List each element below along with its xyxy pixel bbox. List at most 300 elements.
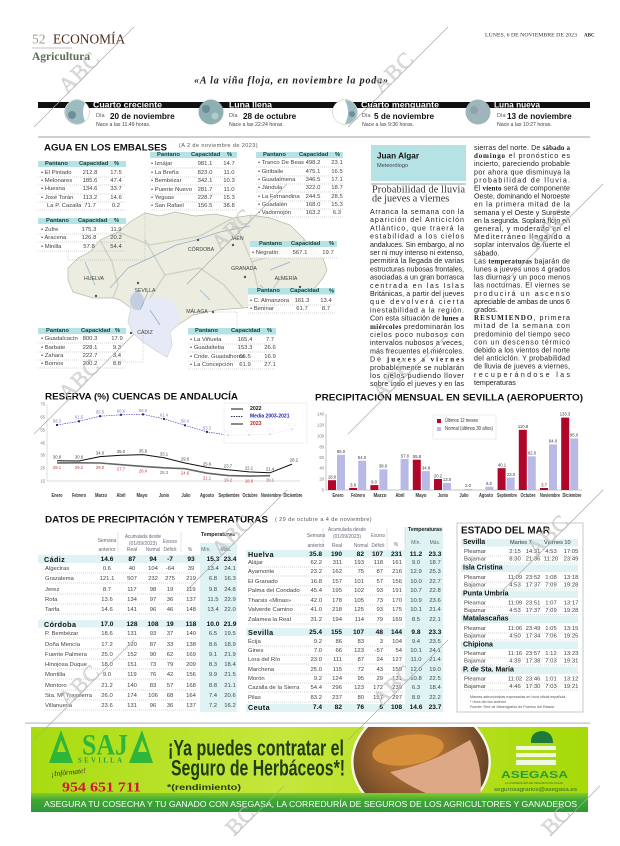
article text: second column: soplar intervalos de fuerte el (474, 241, 570, 249)
line: 2023: 19.2 (224, 478, 233, 482)
tide rows: Sevilla (463, 539, 485, 546)
table: Cádiz y Córdoba: 42 (167, 672, 173, 678)
month labels (52, 493, 302, 499)
month labels: Febrero (351, 493, 365, 499)
bar value labels: 62.0 (528, 450, 537, 456)
tide rows: 19:28 (564, 582, 579, 588)
reservoir table: Córdoba: 156.5 (198, 203, 213, 209)
table: Huelva, Sevilla y Ceuta: 296 (332, 685, 343, 691)
table: Huelva, Sevilla y Ceuta: 157 (373, 695, 383, 701)
heading: DATOS DE PRECIPITACIÓN Y TEMPERATURAS (45, 514, 269, 526)
reservoir table: Málaga (188, 328, 276, 369)
reservoir table: Jaén: • Vadomojón (258, 210, 291, 216)
table: Cádiz y Córdoba: 16.3 (224, 576, 236, 582)
watermarks: ABC: ABC (53, 46, 105, 98)
table: Huelva, Sevilla y Ceuta: 237 (332, 695, 342, 701)
article text: first column: intervalos nubosos a veces, (370, 339, 464, 347)
reservoir table: Granada: % (329, 241, 334, 247)
reservoir table: Córdoba: • Yeguas (151, 195, 174, 201)
month labels: Julio (460, 493, 469, 499)
footnotes: Fuente: Red de Mareógrafos de Puertos del Estado (470, 705, 554, 709)
table: Cádiz y Córdoba: Grazalema (45, 576, 75, 582)
reservoir table: Almería: Pantano (257, 288, 280, 294)
table: Huelva, Sevilla y Ceuta: 101 (354, 579, 364, 585)
table: Huelva, Sevilla y Ceuta: 35.8 (309, 550, 322, 558)
article text: second column: del anticiclón. Y probabilidad (474, 355, 570, 363)
table: Cádiz y Córdoba: 13.4 (207, 566, 219, 572)
table: Cádiz y Córdoba: 140 (127, 683, 138, 689)
legend: 2022 (250, 406, 262, 412)
legend (224, 403, 307, 443)
bar value labels: 55.8 (413, 454, 422, 459)
tide rows: 4:53 (509, 608, 521, 614)
table: Cádiz y Córdoba: 11.5 (207, 597, 219, 603)
month labels: Febrero (72, 493, 86, 499)
reservoir table: Córdoba: 342.1 (198, 178, 212, 184)
date note: ( 29 de octubre a 4 de noviembre) (275, 517, 372, 523)
table: Huelva, Sevilla y Ceuta: Exceso (371, 533, 385, 539)
table: Cádiz y Córdoba: Doña Mencía (45, 642, 81, 648)
tide rows: Punta Umbría (463, 590, 509, 598)
phone contact: 954 651 711 (62, 780, 141, 794)
moon phase text: luna nueva: Día (497, 113, 506, 119)
table: Huelva, Sevilla y Ceuta: 82 (335, 704, 342, 710)
table: Huelva, Sevilla y Ceuta: 95 (357, 676, 365, 682)
table: Cádiz y Córdoba: Cádiz (44, 554, 65, 564)
reservoir table: Granada: 567.1 (293, 250, 307, 256)
month labels: Mayo (416, 493, 427, 499)
table: Cádiz y Córdoba: 121.1 (100, 576, 114, 582)
axes: 80 (319, 444, 325, 450)
table: Cádiz y Córdoba: 131 (127, 631, 137, 637)
table: Huelva, Sevilla y Ceuta: 21.4 (429, 657, 441, 663)
bar value labels: 20.2 (434, 474, 443, 478)
reservoir table: Zufre: 57.8 (83, 244, 95, 250)
table: Huelva, Sevilla y Ceuta: 8.9 (412, 695, 420, 701)
reservoir table: Málaga: 27.1 (264, 362, 276, 368)
article text: second column: por ahora que disminuya la (474, 168, 570, 176)
table: Cádiz y Córdoba: 21.1 (224, 683, 236, 689)
table: Huelva, Sevilla y Ceuta: anterior (308, 543, 325, 549)
table: Huelva, Sevilla y Ceuta: 10.0 (410, 579, 422, 585)
article text: first column: inestabilidad a la región. (370, 306, 464, 314)
table: Cádiz y Córdoba: 118 (186, 620, 197, 628)
reservoir table: Huelva: • José Torán (41, 195, 73, 201)
reservoir table: Huelva: 47.4 (110, 178, 122, 184)
table: Huelva, Sevilla y Ceuta: 170 (392, 598, 403, 604)
line: media 2003-2021: 50.9 (245, 428, 254, 434)
ASAJA logo: SAJ (82, 728, 128, 762)
line: 2023: 26.4 (139, 468, 148, 474)
table: Cádiz y Córdoba: 104 (148, 566, 159, 572)
reservoir table: Huelva: 71.7 (84, 203, 96, 209)
line: 2022: 28.2 (290, 458, 299, 462)
table: Huelva, Sevilla y Ceuta: 9.2 (314, 676, 322, 682)
table: Cádiz y Córdoba: 128 (126, 620, 138, 628)
tide rows: Bajamar (464, 556, 486, 562)
table: Cádiz y Córdoba: 152 (127, 652, 137, 658)
table: Cádiz y Córdoba: 174 (127, 693, 138, 699)
reservoir table: Jaén: 28.5 (331, 194, 343, 200)
moon phase text: cuarto creciente (93, 100, 175, 128)
panel: estado del mar (457, 523, 583, 712)
reservoir table: Jaén: • La Fernandina (258, 194, 300, 200)
table: Cádiz y Córdoba: 10.0 (207, 620, 220, 628)
article text: first column: más frecuentes el miércoles. (370, 347, 464, 355)
reservoir table: Huelva: 14.6 (110, 195, 122, 201)
bar value labels (328, 412, 579, 488)
article text: first column: que devolverá cierta (370, 298, 464, 306)
table: Huelva, Sevilla y Ceuta: 104 (392, 639, 403, 645)
table: Huelva, Sevilla y Ceuta: 11.2 (410, 550, 423, 558)
tide rows: 23:46 (526, 676, 541, 682)
table: Huelva, Sevilla y Ceuta: Lora del Río (248, 657, 281, 663)
table: Cádiz y Córdoba: 23.4 (224, 556, 237, 562)
tide rows: 13:17 (564, 600, 578, 606)
moon phase text: luna llena: Nace a las 22:24 horas. (229, 122, 284, 128)
moon: luna llena (198, 100, 224, 124)
page header: date: LUNES, 6 DE NOVIEMBRE DE 2023 (485, 34, 578, 38)
month labels: Abril (396, 493, 405, 499)
table: Huelva, Sevilla y Ceuta: 43 (376, 667, 384, 673)
phone contact (51, 766, 141, 794)
article text: second column: de lluvia de jueves a viernes, (474, 363, 570, 371)
bar value labels: 3.7 (541, 482, 548, 488)
reservoir table: Almería: 61.7 (296, 306, 308, 312)
table: Huelva, Sevilla y Ceuta: 12.9 (410, 569, 422, 575)
tide rows: 17:37 (526, 608, 540, 614)
moon phase text: cuarto creciente: 20 de noviembre (110, 112, 175, 120)
table: Cádiz y Córdoba: Villanueva (45, 703, 73, 709)
reservoir table: Jaén: 475.1 (306, 169, 320, 175)
tide rows: 1:07 (545, 600, 557, 606)
table: Cádiz y Córdoba: 96 (150, 607, 157, 613)
month labels: Junio (438, 493, 448, 499)
table: Huelva, Sevilla y Ceuta: 24.1 (429, 648, 441, 654)
tide rows: Bajamar (464, 608, 486, 614)
table: Huelva, Sevilla y Ceuta: 169 (392, 617, 402, 623)
table: Cádiz y Córdoba: 0.6 (103, 566, 112, 572)
reservoir table: Huelva: La P. Cazalla (47, 203, 82, 209)
moon phase text: luna nueva: Luna nueva (494, 100, 540, 110)
moon phase text: luna nueva: Nace a las 10:27 horas. (497, 122, 552, 128)
table: Cádiz y Córdoba: Máx. (221, 547, 231, 553)
tide rows: 13:18 (564, 575, 579, 581)
line: 2022: 23.7 (224, 464, 233, 468)
moon phase text: luna llena: Luna llena (229, 100, 272, 110)
article text: first column: asociadas a un gran borrasca (370, 274, 464, 282)
tide rows: 23:49 (564, 556, 578, 562)
table: Huelva, Sevilla y Ceuta: Temperaturas (408, 527, 442, 533)
table: Cádiz y Córdoba: (01/09/2023) (129, 541, 157, 547)
bar value labels: 84.0 (549, 438, 558, 444)
table: Huelva, Sevilla y Ceuta: 191 (392, 588, 402, 594)
footnotes (470, 695, 566, 709)
tide rows: 13:15 (564, 626, 579, 632)
reservoir table: Jaén: 322.0 (306, 185, 321, 191)
table: Cádiz y Córdoba: 19 (167, 587, 173, 593)
reservoir table: Zufre: 126.8 (82, 235, 97, 241)
table: Huelva, Sevilla y Ceuta: 195 (332, 588, 343, 594)
watermarks: ABC: ABC (522, 509, 574, 561)
table: Huelva, Sevilla y Ceuta: Ceuta (248, 702, 271, 712)
table: Huelva, Sevilla y Ceuta: 9.0 (412, 560, 421, 566)
table: Cádiz y Córdoba: Déficit (164, 547, 177, 553)
reservoir table: Córdoba: Capacidad (191, 152, 221, 158)
table: Huelva, Sevilla y Ceuta: 125 (354, 607, 365, 613)
heading: AGUA EN LOS EMBALSES (44, 142, 168, 154)
line: 2022: 29.0 (181, 456, 190, 462)
bar value labels: 23.0 (507, 472, 516, 477)
bars: normal 30 años (337, 438, 578, 490)
axes: 65 (40, 414, 46, 420)
table: Huelva, Sevilla y Ceuta: (01/09/2023) (333, 534, 361, 540)
table: Huelva, Sevilla y Ceuta: 159 (392, 667, 402, 673)
ASEGASA logo: LA CORREDURÍA DE SEGUROS DE ASAJA (505, 781, 563, 785)
line: 2023: 25.3 (160, 470, 169, 475)
table: Huelva, Sevilla y Ceuta: 22.7 (429, 579, 441, 585)
panel: datos de precipitación y temperaturas (38, 514, 443, 712)
table: Cádiz y Córdoba: Montoro (45, 683, 67, 689)
tide rows: 11:06 (508, 626, 523, 632)
table: Huelva, Sevilla y Ceuta: 22.8 (429, 588, 441, 594)
table: Huelva, Sevilla y Ceuta: 127 (392, 657, 402, 663)
table: Huelva, Sevilla y Ceuta: 10.1 (410, 648, 422, 654)
article text: second column: sábado. (474, 249, 499, 257)
table: Cádiz y Córdoba: 7.4 (209, 693, 218, 699)
table: Huelva, Sevilla y Ceuta: 193 (354, 560, 365, 566)
article text: second column: lunes a jueves unos 4 grados (474, 266, 570, 274)
month labels: Marzo (374, 493, 387, 499)
table: Huelva, Sevilla y Ceuta: 25.3 (429, 569, 441, 575)
reservoir table: Jaén: 18.7 (331, 185, 343, 191)
reservoir table: Málaga: % (267, 328, 272, 334)
table: Cádiz y Córdoba: Montilla (45, 672, 66, 678)
article text: second column: recuperándose las (474, 371, 570, 379)
table: Cádiz y Córdoba: 6.5 (209, 631, 218, 637)
page header: section: 52 (32, 32, 46, 46)
tide rows: Bajamar (464, 582, 486, 588)
table: Huelva, Sevilla y Ceuta: 23.3 (429, 550, 442, 558)
reservoir table: Málaga: 7.7 (266, 337, 274, 343)
moon: cuarto menguante (332, 100, 358, 124)
table: Huelva, Sevilla y Ceuta: 162 (332, 569, 342, 575)
article text: second column: las diurnas y un poco menos (474, 274, 570, 282)
axes (40, 402, 300, 484)
reservoir table: Córdoba: • Puente Nuevo (151, 187, 193, 193)
table: Cádiz y Córdoba: 22.9 (224, 597, 236, 603)
article text: first column: permitirá la llegada de varias (370, 257, 464, 265)
table: Huelva, Sevilla y Ceuta: 66 (335, 648, 343, 654)
reservoir table: Cádiz: 228.1 (83, 345, 97, 351)
axes: 25 (40, 466, 46, 470)
table: Cádiz y Córdoba: 134 (127, 597, 138, 603)
panel: moon phases (38, 100, 590, 138)
article text: second column: predominio del tiempo seco (474, 330, 570, 338)
table: Cádiz y Córdoba: 40 (129, 566, 136, 572)
table: Cádiz y Córdoba: 219 (186, 576, 196, 582)
table: Huelva, Sevilla y Ceuta: 157 (332, 579, 342, 585)
month labels: Noviembre (261, 493, 281, 499)
reservoir table: Cádiz: • Guadalcacín (41, 336, 78, 342)
chart: reserva cuencas de Andalucía (40, 390, 307, 499)
table: Huelva, Sevilla y Ceuta: 105 (354, 598, 365, 604)
article text: second column: debido a los vientos del norte (474, 346, 570, 354)
tide rows: 23:52 (526, 575, 540, 581)
footnotes: * Hora del día anterior (470, 700, 507, 704)
line: media 2003-2021: 55.4 (288, 422, 297, 428)
table: Huelva, Sevilla y Ceuta: 190 (331, 550, 342, 558)
article text: second column: producirá un ascenso (474, 290, 570, 298)
table: Cádiz y Córdoba: 15.3 (207, 556, 220, 562)
table: Huelva, Sevilla y Ceuta: 9.2 (314, 639, 322, 645)
reservoir table: Málaga: 16.9 (264, 354, 276, 360)
tide rows: Pleamar (464, 600, 486, 606)
reservoir table: Granada: • Negratín (252, 250, 278, 256)
ASEGASA logo: ASEGASA (501, 769, 569, 781)
table: Cádiz y Córdoba: 8.7 (103, 587, 111, 593)
axes: 40 (319, 466, 325, 470)
table: Cádiz y Córdoba: 8.6 (209, 642, 218, 648)
table: Cádiz y Córdoba: 96 (150, 703, 157, 709)
line: 2022: 22.1 (245, 466, 254, 470)
reservoir table: Jaén (256, 152, 343, 217)
table: Huelva, Sevilla y Ceuta: 73 (376, 598, 384, 604)
bar value labels: 18.0 (328, 474, 337, 480)
table: Cádiz y Córdoba: 151 (127, 662, 137, 668)
watermarks: ABC: ABC (522, 203, 574, 255)
date note: (A 2 de noviembre de 2023) (179, 143, 258, 149)
table: Huelva, Sevilla y Ceuta: 45.4 (311, 588, 323, 594)
map of Andalucía (68, 212, 327, 362)
tide rows: 4:50 (509, 634, 521, 640)
bar value labels: 3.8 (350, 482, 357, 488)
table: Huelva, Sevilla y Ceuta: 18.4 (429, 685, 441, 691)
table: Huelva, Sevilla y Ceuta: 82 (357, 550, 364, 558)
reservoir table: Cádiz: 3.4 (113, 353, 122, 359)
table: Huelva, Sevilla y Ceuta: 8.5 (412, 617, 421, 623)
line: 2023: 21.1 (203, 476, 212, 480)
tide rows: 19:21 (564, 684, 578, 690)
table: Cádiz y Córdoba: Tarifa (45, 607, 60, 613)
table: Cádiz y Córdoba: 73 (150, 662, 157, 668)
table: Huelva, Sevilla y Ceuta: 114 (355, 617, 365, 623)
reservoir table: Cádiz: % (115, 328, 120, 334)
table: Cádiz y Córdoba: 17.2 (101, 642, 113, 648)
tide rows: 1:12 (545, 651, 557, 657)
table: Cádiz y Córdoba: 140 (186, 631, 197, 637)
table: Cádiz y Córdoba: 68 (167, 693, 174, 699)
article text: first column: Con esta situación de lunes a (370, 315, 464, 323)
month labels: Agosto (479, 493, 493, 499)
tide rows: 23:51 (526, 600, 540, 606)
table: Huelva, Sevilla y Ceuta: 115 (333, 667, 343, 673)
tide rows: 21:36 (526, 556, 541, 562)
reservoir table: Córdoba: 10.3 (223, 178, 235, 184)
table: Cádiz y Córdoba: 93 (150, 631, 157, 637)
table: Huelva, Sevilla y Ceuta: 41.0 (311, 607, 323, 613)
reservoir table: Córdoba (150, 152, 237, 210)
month labels: Mayo (136, 493, 148, 499)
table: Huelva, Sevilla y Ceuta: Marchena (248, 667, 275, 673)
tide rows: 19:31 (564, 658, 578, 664)
reservoir table: Málaga: 26.6 (264, 345, 276, 351)
reservoir table: Zufre: Capacidad (78, 218, 108, 224)
reservoir table: Málaga: 66.5 (239, 354, 251, 360)
reservoir table: Córdoba: 38.8 (223, 203, 235, 209)
reservoir table: Almería: 13.4 (320, 298, 332, 304)
table: Cádiz y Córdoba: 507 (127, 576, 137, 582)
tide rows: Isla Cristina (463, 564, 503, 572)
axes: 45 (40, 440, 46, 446)
table: Huelva, Sevilla y Ceuta: 79 (376, 617, 383, 623)
table: Huelva, Sevilla y Ceuta: 156 (392, 579, 403, 585)
article text: second column: RESUMIENDO, primera (474, 314, 570, 322)
legend: 2023 (250, 421, 262, 427)
table: Huelva, Sevilla y Ceuta: 155 (331, 628, 342, 636)
table: Huelva, Sevilla y Ceuta: 108 (391, 704, 402, 710)
article text: second column: Oeste, dominando el Noroeste (474, 193, 570, 201)
reservoir table: Huelva: 212.8 (83, 170, 98, 176)
table: Huelva, Sevilla y Ceuta: 93 (376, 588, 384, 594)
table: Huelva, Sevilla y Ceuta: 25.0 (311, 667, 323, 673)
photo: hand with grain (351, 727, 491, 793)
table: Huelva, Sevilla y Ceuta: Normal (354, 543, 368, 549)
tide rows: Pleamar (464, 626, 486, 632)
reservoir table: Huelva: 134.6 (83, 186, 98, 192)
table: Cádiz y Córdoba: 117 (127, 587, 137, 593)
table: Cádiz y Córdoba: 97 (150, 597, 156, 603)
reservoir table: Cádiz: 222.7 (83, 353, 97, 359)
map of Andalucía: HUELVA (84, 276, 105, 282)
moon phase text: cuarto menguante: 5 de noviembre (374, 112, 435, 120)
month labels: Abril (116, 493, 126, 499)
tide rows: 19:28 (564, 608, 579, 614)
article text: second column: domingo el pronóstico es (474, 152, 570, 160)
tide rows: 23:57 (526, 651, 540, 657)
table: Huelva, Sevilla y Ceuta: 7.4 (313, 704, 322, 710)
table: Huelva, Sevilla y Ceuta: 76 (357, 704, 364, 710)
bar value labels: 6.0 (486, 481, 493, 486)
article text: first column: andaluces. Sin embargo, al no (370, 241, 464, 249)
table: Huelva, Sevilla y Ceuta: 218 (332, 607, 343, 613)
article text: first column: cielos poco nubosos con (370, 331, 464, 339)
reservoir table: Jaén: 15.3 (331, 202, 343, 208)
tide rows: Bajamar (464, 634, 486, 640)
reservoir table: Cádiz: Capacidad (81, 328, 111, 334)
month labels: Octubre (242, 493, 258, 499)
axes: 15 (40, 478, 46, 484)
month labels: Marzo (95, 493, 107, 499)
article text: first column: los cielos pudiendo llover (370, 372, 465, 380)
reservoir table: Córdoba: 15.3 (223, 195, 235, 201)
table: Huelva, Sevilla y Ceuta: Máx. (430, 540, 440, 546)
reservoir table: Málaga: 61.9 (239, 362, 251, 368)
page header: section: Agricultura (32, 51, 90, 63)
table: Cádiz y Córdoba: 33 (167, 642, 174, 648)
line: 2022 (53, 448, 299, 473)
table: Cádiz y Córdoba: 120 (127, 642, 138, 648)
tide rows: 7:09 (545, 608, 557, 614)
reservoir table: Málaga: • Guadalteba (190, 345, 225, 351)
table: Cádiz y Córdoba: 21.9 (224, 620, 237, 628)
table: Huelva, Sevilla y Ceuta: 29 (376, 676, 383, 682)
station bands (461, 539, 578, 674)
table: Huelva, Sevilla y Ceuta: 86 (335, 639, 343, 645)
table: Cádiz y Córdoba: Acumulada desde (125, 534, 161, 540)
page header: date: ABC (584, 34, 595, 38)
watermarks: ABC: ABC (206, 509, 258, 561)
